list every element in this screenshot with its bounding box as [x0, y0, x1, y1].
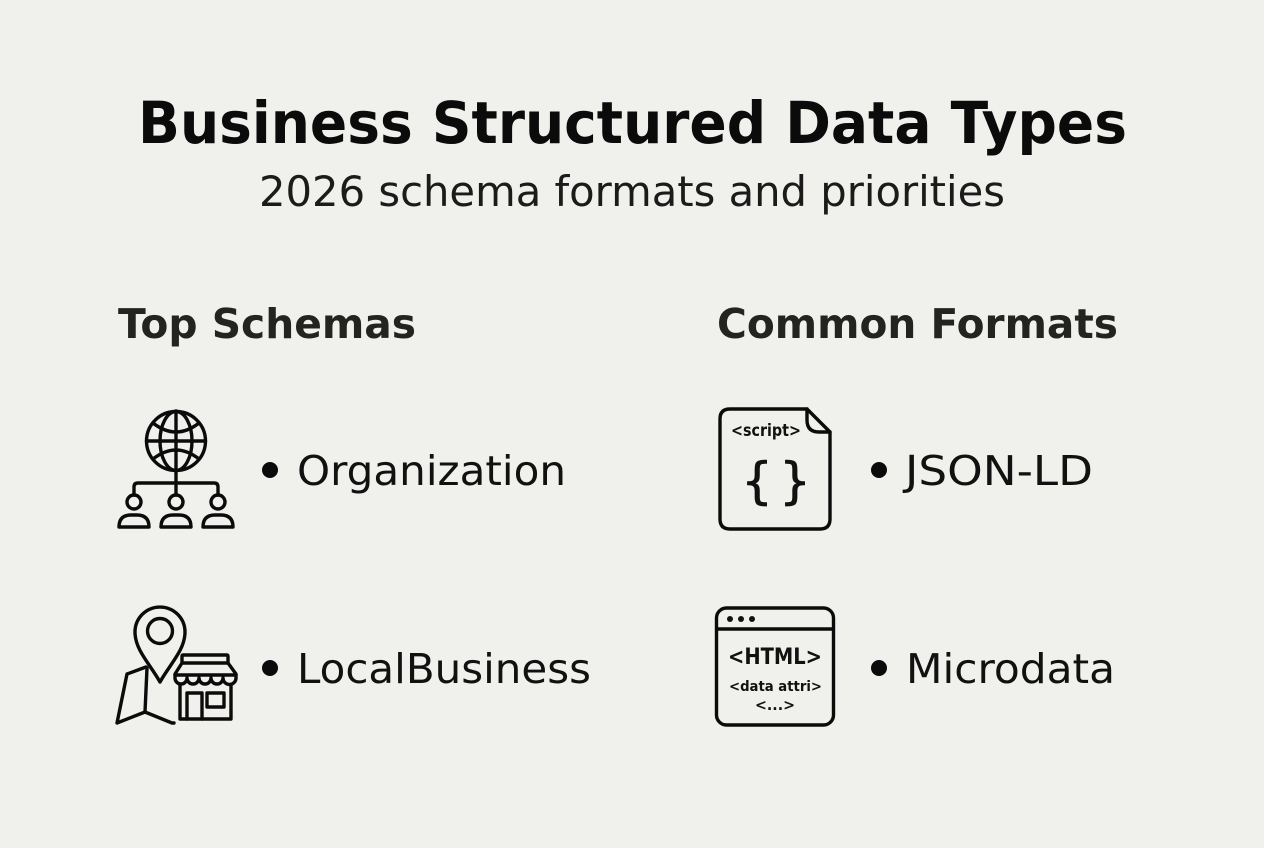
icon: html browser window: <HTML>: [728, 645, 822, 670]
subtitle: 2026 schema formats and priorities: [259, 167, 1005, 216]
heading: common formats: Common Formats: [717, 300, 1118, 348]
label: localbusiness: LocalBusiness: [297, 645, 591, 693]
bullet: microdata: [871, 660, 887, 676]
heading: top schemas: Top Schemas: [118, 300, 416, 348]
icon: html browser window: [716, 608, 834, 725]
icon: globe with org chart: [119, 411, 233, 527]
title: Business Structured Data Types: [138, 89, 1127, 157]
bullet: json-ld: [871, 462, 887, 478]
label: json-ld: JSON-LD: [902, 447, 1093, 495]
icon: script document: {: [741, 452, 773, 510]
icon: html browser window: <...>: [755, 696, 795, 714]
bullet: localbusiness: [262, 660, 278, 676]
icon: map pin with storefront: [117, 607, 236, 723]
bullet: organization: [262, 462, 278, 478]
icon: script document: [720, 409, 830, 529]
icon: html browser window: <data attri>: [729, 679, 822, 695]
icon: script document: }: [779, 452, 811, 510]
label: microdata: Microdata: [906, 645, 1115, 693]
label: organization: Organization: [297, 447, 566, 495]
icon: script document: <script>: [731, 421, 801, 441]
